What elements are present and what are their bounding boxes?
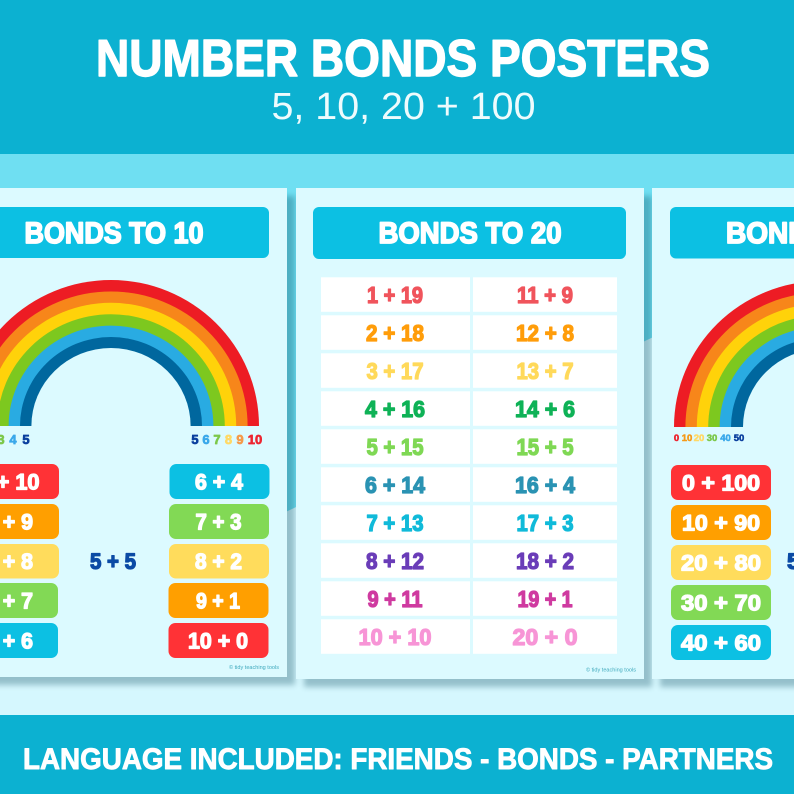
bonds table: 19 + 1	[518, 586, 573, 612]
rainbow: bonds to 10	[0, 280, 259, 426]
rainbow number labels: 10: 4	[9, 432, 17, 447]
heading bar: bonds to 10: BONDS TO 10	[24, 217, 204, 250]
rainbow number labels: 100: 10	[682, 433, 692, 444]
rainbow number labels: 100: 0	[674, 433, 679, 444]
credit: bonds to 10: © tidy teaching tools	[229, 664, 279, 671]
credit: bonds to 20: © tidy teaching tools	[586, 666, 636, 674]
rainbow number labels: 10: 6	[202, 432, 210, 447]
rainbow number labels: 100: 20	[694, 433, 704, 444]
bond boxes: 100	[671, 465, 771, 660]
rainbow number labels: 100	[674, 433, 744, 444]
bonds table: 7 + 13	[366, 510, 424, 536]
heading bar: bonds to 20: BONDS TO 20	[378, 217, 562, 250]
right bond boxes: 10: 6 + 4	[195, 470, 244, 494]
bonds table: 6 + 14	[365, 472, 425, 498]
subtitle: 5, 10, 20 + 100	[272, 86, 536, 128]
bond boxes: 100: 0 + 100	[682, 470, 760, 496]
rainbow number labels: 10: 10	[248, 432, 262, 447]
rainbow number labels: 10: 7	[213, 432, 221, 447]
heading bar: bonds to 100	[670, 207, 794, 258]
rainbow number labels: 10	[0, 432, 262, 447]
rainbow: bonds to 100	[674, 281, 794, 427]
bonds table: 4 + 16	[365, 396, 425, 422]
bonds table: 5 + 15	[366, 434, 424, 460]
poster: bonds to 100	[652, 188, 794, 687]
bonds table: 17 + 3	[516, 510, 574, 536]
right bond boxes: 10: 9 + 1	[196, 588, 240, 614]
bonds table: 18 + 2	[516, 548, 574, 574]
bonds table: 15 + 5	[516, 434, 574, 460]
right bond boxes: 10: 10 + 0	[188, 628, 248, 654]
bonds table: 16 + 4	[515, 472, 575, 498]
bond boxes: 100: 40 + 60	[681, 630, 761, 656]
header banner	[0, 0, 794, 154]
bonds table: 2 + 18	[366, 320, 424, 346]
rainbow number labels: 10: 5	[22, 432, 30, 447]
rainbow number labels: 10: 5	[191, 432, 199, 447]
bonds table: 14 + 6	[515, 396, 575, 422]
heading bar: bonds to 20	[313, 207, 626, 259]
bonds table	[321, 277, 617, 654]
poster: bonds to 20	[296, 188, 652, 687]
bonds table: 13 + 7	[516, 358, 574, 384]
bonds table: 11 + 9	[517, 282, 573, 308]
bonds table: 20 + 0	[512, 624, 578, 650]
left bond boxes: 10	[0, 464, 59, 658]
poster: bonds to 10	[0, 188, 295, 685]
rainbow number labels: 100: 30	[707, 433, 717, 444]
right bond boxes: 10: 8 + 2	[195, 549, 242, 574]
rainbow number labels: 10: 9	[236, 432, 244, 447]
bonds table: 1 + 19	[367, 282, 423, 308]
rainbow number labels: 100: 50	[734, 433, 744, 444]
footer banner	[0, 715, 794, 794]
bond boxes: 100: 10 + 90	[682, 510, 760, 536]
bond boxes: 100: 20 + 80	[681, 550, 761, 576]
bonds table: 3 + 17	[366, 358, 424, 384]
bonds table: 8 + 12	[366, 548, 424, 574]
bonds table: 12 + 8	[516, 320, 574, 346]
title: NUMBER BONDS POSTERS	[96, 30, 710, 88]
bond boxes: 100: 30 + 70	[681, 590, 761, 616]
bonds table: 10 + 10	[358, 624, 432, 650]
rainbow number labels: 10: 8	[225, 432, 232, 447]
heading bar: bonds to 10	[0, 207, 269, 258]
rainbow number labels: 100: 40	[720, 433, 731, 444]
right bond boxes: 10: 7 + 3	[196, 510, 242, 534]
right bond boxes: 10	[168, 464, 270, 658]
center bond: 5 + 5: 5 + 5	[90, 549, 136, 574]
bonds table: 9 + 11	[368, 586, 423, 612]
